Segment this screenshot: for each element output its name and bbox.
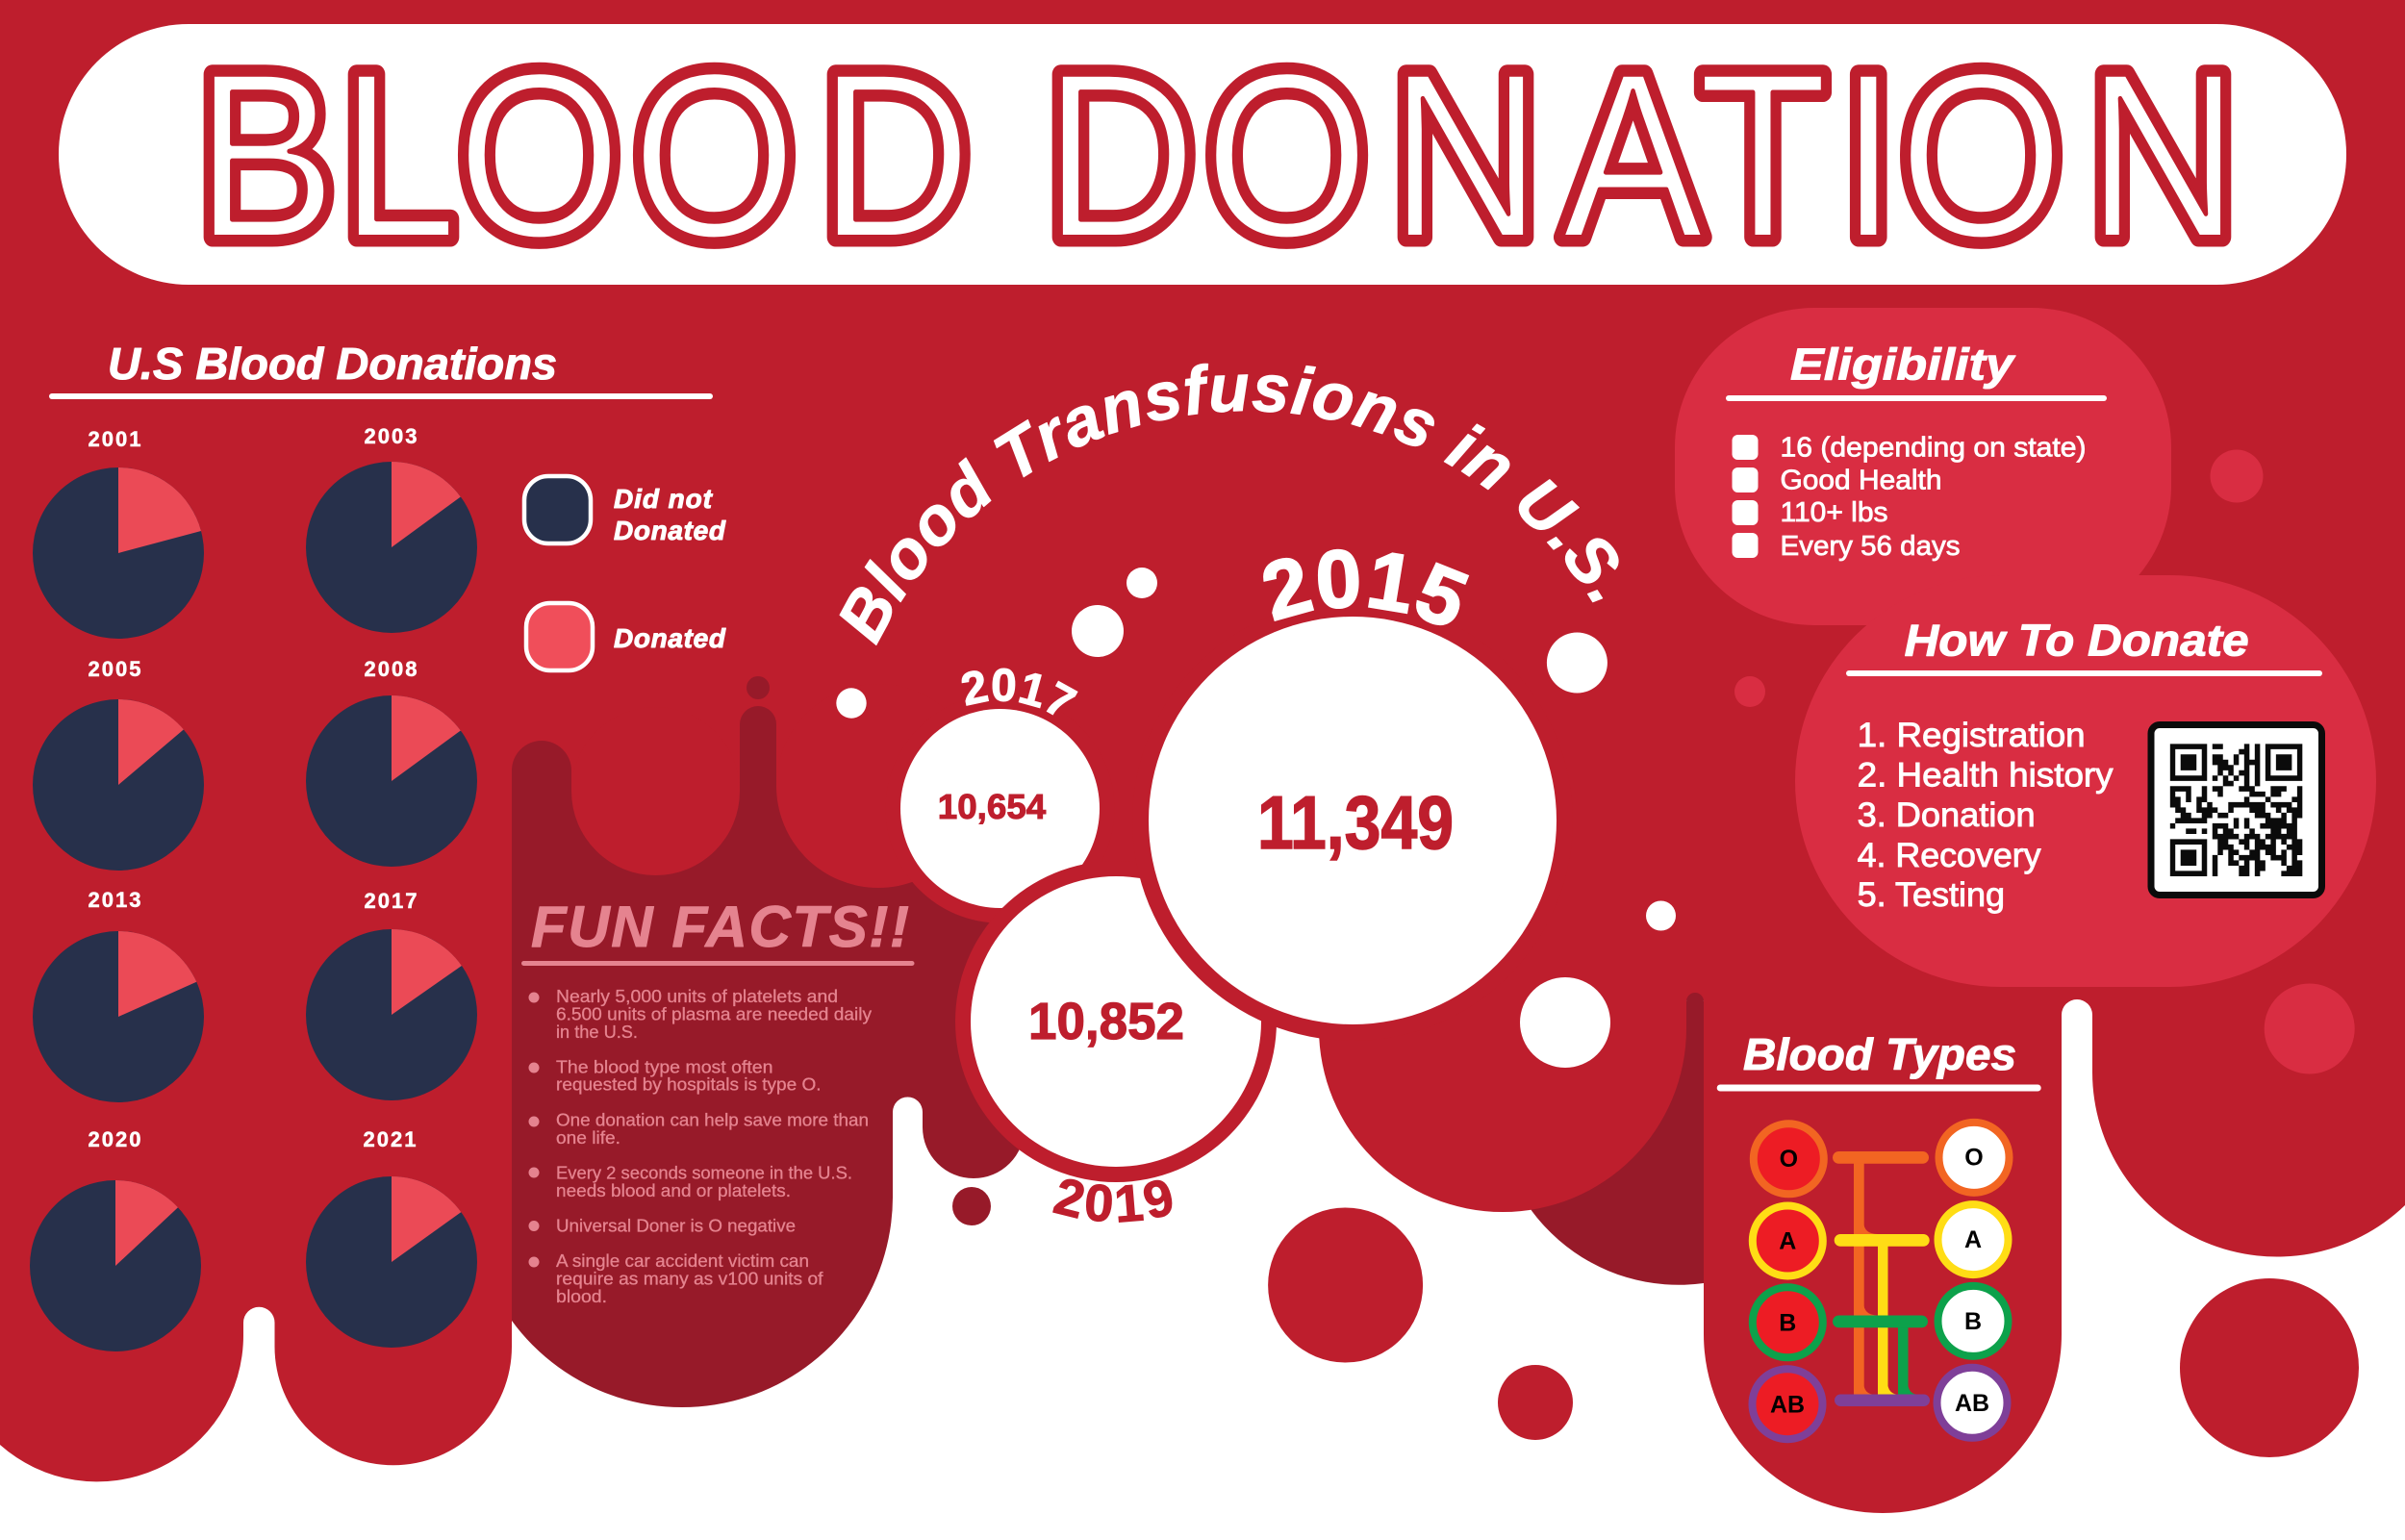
fact 6: A single car accident victim can <box>556 1251 809 1271</box>
pie chart 2020 <box>30 1127 201 1351</box>
bubble 2015: 11,349 <box>1257 780 1454 865</box>
pie chart 2013: 2013 <box>89 888 142 912</box>
numbered steps: 2. Health history <box>1858 757 2114 795</box>
droplet <box>747 676 770 699</box>
fact 2: requested by hospitals is type O. <box>556 1075 822 1095</box>
fact 4: needs blood and or platelets. <box>556 1181 791 1200</box>
compatibility connectors <box>1833 1151 1930 1406</box>
heading: U.S Blood Donations: U.S Blood Donations <box>108 339 557 389</box>
pie chart 2017 <box>306 889 477 1100</box>
fact 1: in the U.S. <box>556 1022 638 1042</box>
title banner <box>59 23 2346 288</box>
bubble 2019: 10,852 <box>1028 993 1184 1050</box>
pie chart 2017: 2017 <box>365 889 418 913</box>
decorative bubbles: red <box>1268 1208 2359 1457</box>
panel: blood types <box>1717 1029 2041 1439</box>
red central blob <box>1319 962 1686 1212</box>
numbered steps: 1. Registration <box>1858 717 2086 754</box>
donor circles: O <box>1964 1145 1984 1172</box>
pie chart 2020: 2020 <box>89 1127 142 1151</box>
pie chart 2005 <box>33 657 204 871</box>
bubble 2017: 10,654 <box>938 787 1046 826</box>
fact 1: Nearly 5,000 units of platelets and <box>556 987 838 1006</box>
panel: U.S blood donations <box>30 339 726 1351</box>
numbered steps: 5. Testing <box>1858 876 2005 914</box>
fact 6: require as many as v100 units of <box>556 1270 824 1289</box>
pie chart 2003: 2003 <box>365 424 418 448</box>
QR code <box>2151 725 2322 895</box>
fact 3: One donation can help save more than <box>556 1110 869 1129</box>
panel: eligibility <box>1726 339 2107 562</box>
fact 6: blood. <box>556 1287 607 1306</box>
fact 5: Universal Doner is O negative <box>556 1217 796 1236</box>
checklist <box>1732 433 2086 562</box>
fact 2: The blood type most often <box>556 1057 773 1076</box>
pie chart 2008 <box>306 657 477 867</box>
fact 3 <box>529 1110 869 1148</box>
legend: Donated <box>614 516 726 545</box>
fact 6 <box>529 1251 824 1306</box>
decorative bubbles: white <box>836 568 1676 1068</box>
bubble 2015: 2015 <box>1263 548 1470 625</box>
donor circles: B <box>1964 1308 1982 1335</box>
title text: BLOOD DONATION <box>195 23 2240 288</box>
checklist: Good Health <box>1780 466 1941 496</box>
panel: fun facts background <box>512 706 1058 1407</box>
panel: how to donate background <box>1795 575 2376 987</box>
bubble 2019 <box>955 864 1277 1223</box>
bubble 2015 <box>1140 548 1557 1039</box>
decorative bubbles: light <box>1734 450 2355 1073</box>
fact 4 <box>529 1164 852 1200</box>
pie chart 2001 <box>33 427 204 639</box>
recipient circles <box>1753 1123 1824 1439</box>
donor circles <box>1937 1123 2009 1438</box>
recipient circles: AB <box>1770 1391 1805 1418</box>
pie chart 2008: 2008 <box>365 657 418 681</box>
donor circles: A <box>1964 1226 1982 1253</box>
fact 1 <box>529 987 872 1042</box>
red arch 1 <box>571 707 740 875</box>
heading: blood types: Blood Types <box>1743 1029 2016 1079</box>
pie chart 2005: 2005 <box>89 657 142 681</box>
donor circles: AB <box>1955 1390 1989 1417</box>
pie chart 2021 <box>306 1127 477 1348</box>
panel: eligibility background <box>1675 308 2171 625</box>
checklist: 16 (depending on state) <box>1780 433 2086 464</box>
numbered steps: 4. Recovery <box>1858 837 2041 874</box>
checklist: Every 56 days <box>1780 531 1961 562</box>
title text: BLOOD DONATION <box>195 23 2240 288</box>
heading: fun facts: FUN FACTS!! <box>531 895 909 959</box>
fact 2 <box>529 1057 822 1095</box>
recipient circles: B <box>1779 1309 1796 1336</box>
fact 4: Every 2 seconds someone in the U.S. <box>556 1164 852 1183</box>
recipient circles: A <box>1779 1228 1796 1255</box>
legend: Donated <box>614 623 726 653</box>
pie chart 2021: 2021 <box>364 1127 418 1151</box>
panel: blood transfusions <box>839 364 1619 1223</box>
bubble 2017 <box>900 668 1100 922</box>
numbered steps: 3. Donation <box>1858 796 2036 834</box>
pie chart 2013 <box>33 888 204 1102</box>
numbered steps <box>1858 717 2114 914</box>
heading: eligibility: Eligibility <box>1790 339 2016 389</box>
panel: how to donate <box>1846 616 2322 914</box>
legend: Did not <box>614 484 714 514</box>
dark drip behind central blob <box>1496 993 1704 1285</box>
legend <box>524 476 726 670</box>
bubble 2019: 2019 <box>1052 1179 1172 1223</box>
pie chart 2001: 2001 <box>89 427 142 451</box>
fact 1: 6.500 units of plasma are needed daily <box>556 1004 872 1023</box>
curved heading: Blood Transfusions in U.S. <box>839 364 1619 646</box>
red arch 2 <box>776 684 980 888</box>
droplet below fun facts <box>952 1187 991 1225</box>
fact 3: one life. <box>556 1128 620 1148</box>
bubble 2017: 2017 <box>962 668 1078 716</box>
heading: how to donate: How To Donate <box>1905 616 2249 666</box>
panel: fun facts text <box>521 895 914 1306</box>
recipient circles: O <box>1780 1146 1798 1173</box>
pie chart 2003 <box>306 424 477 633</box>
checklist: 110+ lbs <box>1780 497 1887 528</box>
